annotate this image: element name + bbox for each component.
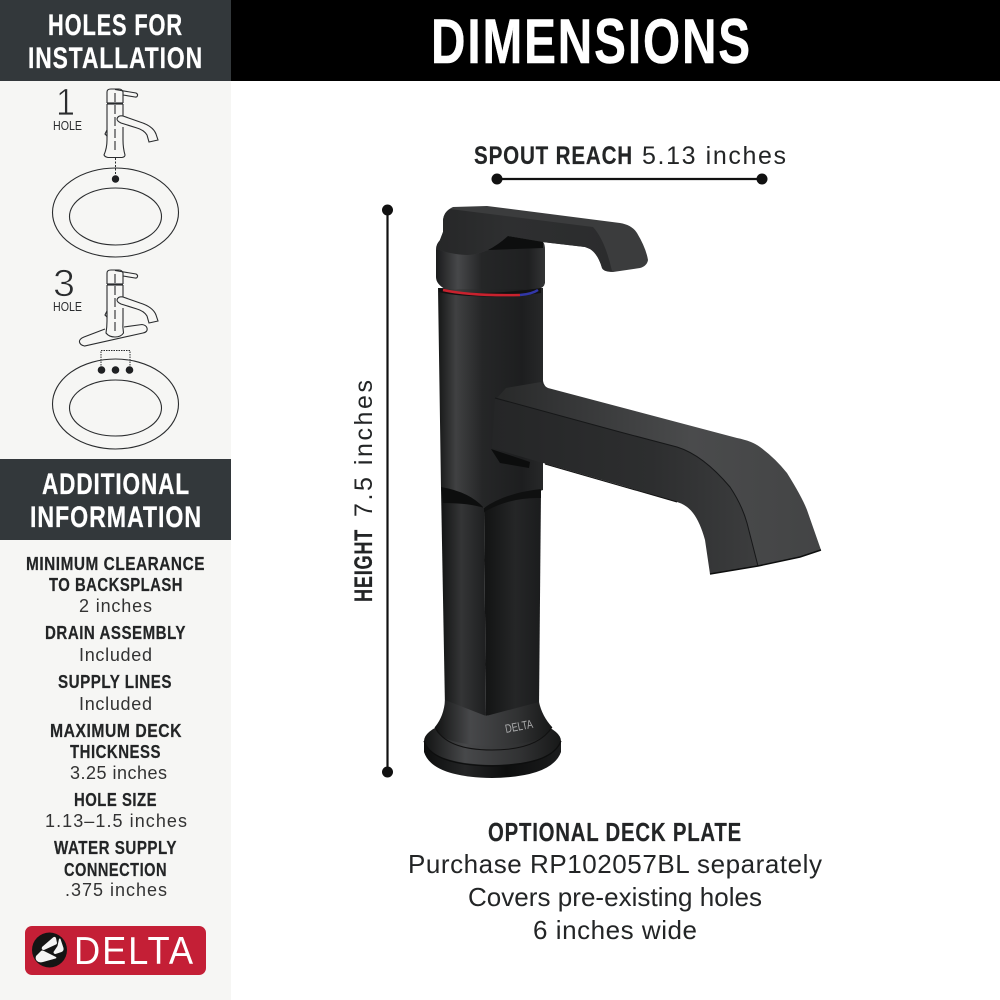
text block: additional information list: 3.25 inches bbox=[70, 763, 167, 783]
icon: single hole faucet bbox=[104, 89, 158, 158]
label: 1 hole: 1 bbox=[56, 82, 75, 124]
text block: additional information list: SUPPLY LINES bbox=[58, 672, 172, 692]
label: 3 hole: 3 bbox=[53, 263, 75, 305]
text block: additional information list: THICKNESS bbox=[70, 742, 161, 762]
dimension: height bbox=[350, 204, 393, 778]
text block: optional deck plate: Covers pre-existing holes bbox=[468, 882, 762, 912]
icon: three hole faucet with deck plate bbox=[79, 270, 158, 346]
faucet base bbox=[424, 700, 561, 778]
faucet cartridge bbox=[436, 236, 545, 289]
faucet lower column bbox=[441, 487, 541, 716]
logo: delta bbox=[25, 926, 206, 975]
dimension: spout reach: 5.13 inches bbox=[642, 142, 786, 170]
heading: dimensions bbox=[231, 0, 1000, 81]
faucet collar highlight and shadow bbox=[486, 396, 530, 468]
faucet upper body bbox=[438, 288, 550, 508]
text block: additional information list: MAXIMUM DECK bbox=[50, 721, 182, 741]
label: 3 hole bbox=[53, 263, 82, 314]
faucet base: DELTA bbox=[504, 717, 534, 736]
heading: additional information: INFORMATION bbox=[30, 501, 202, 534]
text block: additional information list: 2 inches bbox=[79, 596, 152, 616]
dimension: height: 7.5 inches bbox=[350, 380, 378, 517]
text block: additional information list: 1.13–1.5 inches bbox=[45, 811, 187, 831]
icon: single hole sink bbox=[52, 158, 178, 257]
label: 1 hole bbox=[53, 82, 82, 133]
dimension: height: HEIGHT bbox=[350, 529, 378, 602]
text block: optional deck plate bbox=[408, 817, 822, 945]
label: 1 hole: HOLE bbox=[53, 118, 82, 133]
label: 3 hole: HOLE bbox=[53, 299, 82, 314]
text block: additional information list bbox=[26, 554, 205, 900]
text block: additional information list: MINIMUM CLEARANCE bbox=[26, 554, 205, 574]
text block: additional information list: Included bbox=[79, 645, 152, 665]
logo: delta: DELTA bbox=[74, 930, 195, 973]
text block: optional deck plate: 6 inches wide bbox=[533, 915, 697, 945]
icon: three hole sink bbox=[52, 350, 178, 449]
text block: additional information list: .375 inches bbox=[65, 880, 167, 900]
text block: additional information list: CONNECTION bbox=[64, 860, 167, 880]
heading: dimensions: DIMENSIONS bbox=[431, 7, 752, 77]
faucet handle bbox=[436, 206, 648, 272]
text block: additional information list: DRAIN ASSEMBLY bbox=[45, 623, 186, 643]
text block: additional information list: Included bbox=[79, 694, 152, 714]
heading: holes for installation bbox=[0, 0, 231, 81]
faucet spout bbox=[492, 382, 821, 574]
text block: additional information list: WATER SUPPLY bbox=[54, 838, 177, 858]
heading: holes for installation: HOLES FOR bbox=[48, 9, 183, 42]
text block: additional information list: TO BACKSPLASH bbox=[49, 575, 183, 595]
heading: holes for installation: INSTALLATION bbox=[28, 42, 203, 75]
illustration: black faucet bbox=[424, 206, 821, 778]
text block: additional information list: HOLE SIZE bbox=[74, 790, 157, 810]
text block: optional deck plate: Purchase RP102057BL separately bbox=[408, 849, 822, 879]
text block: optional deck plate: OPTIONAL DECK PLATE bbox=[488, 817, 742, 847]
panel: sidebar background bbox=[0, 0, 231, 1000]
dimension: spout reach: SPOUT REACH bbox=[474, 142, 633, 170]
heading: additional information: ADDITIONAL bbox=[42, 468, 190, 501]
heading: additional information bbox=[0, 459, 231, 540]
dimension: spout reach bbox=[474, 142, 786, 184]
faucet hot and cold ring bbox=[439, 288, 541, 297]
